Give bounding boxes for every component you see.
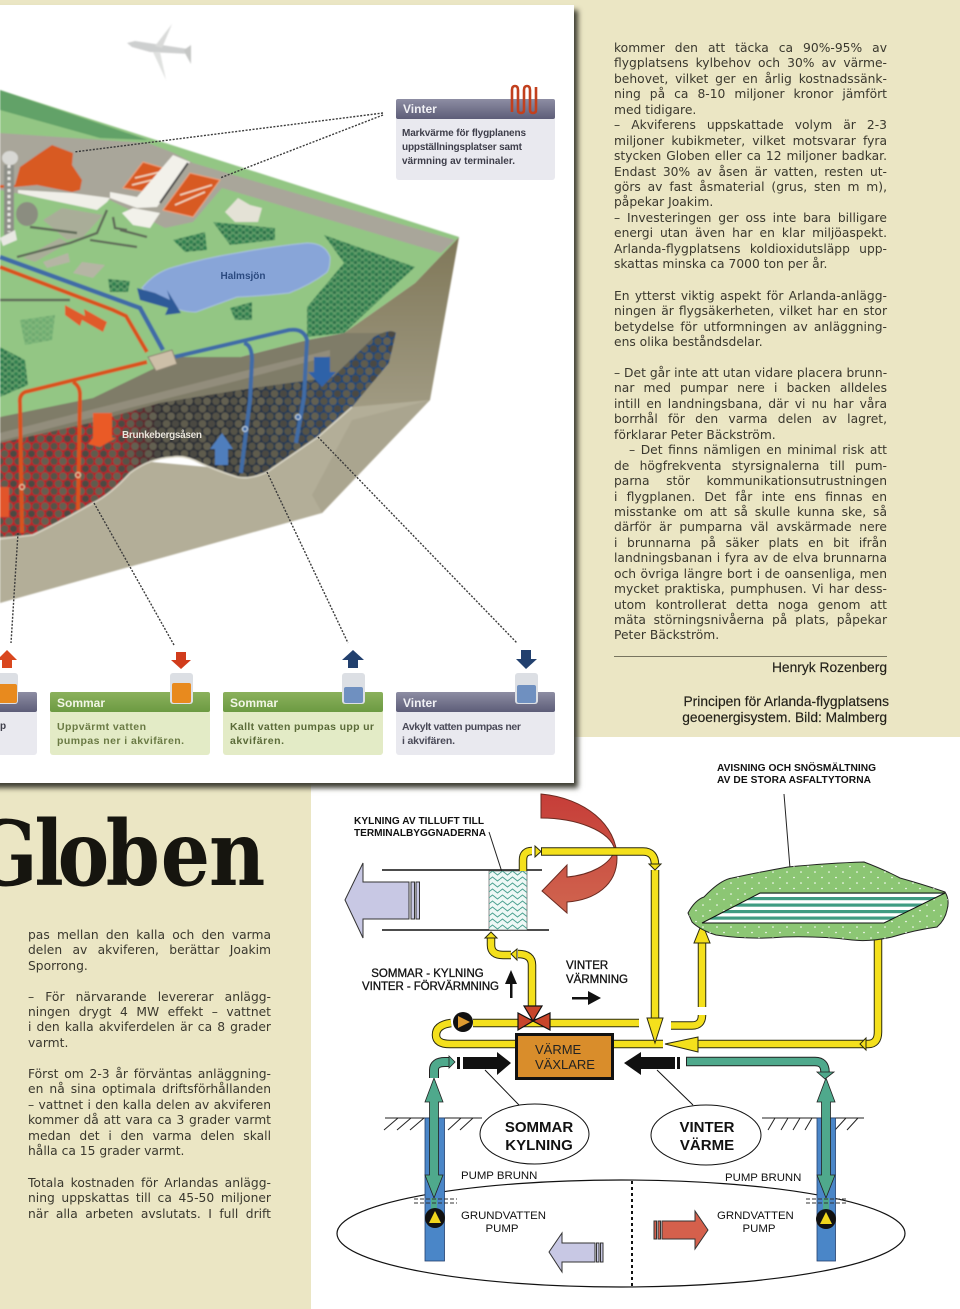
callout: winter ground heat: Markvärme för flygplanens — [402, 128, 526, 139]
label: right pump well: PUMP BRUNN — [725, 1172, 801, 1184]
text block: left column paragraph 3: hålla ca 15 grader varmt. — [28, 1144, 184, 1158]
upper earth band — [0, 333, 396, 449]
leader lines to ovals — [485, 1070, 693, 1105]
green surface — [0, 90, 459, 417]
label: right groundwater pump: PUMP — [743, 1223, 775, 1235]
label: seasonal modes — [362, 968, 499, 993]
text block: right column paragraph 3 — [614, 366, 888, 642]
text block: right column paragraph 2 — [614, 289, 888, 349]
text block: left column paragraph 4: när alla arbeten avslutats. I full drift — [28, 1207, 271, 1221]
text block: right column paragraph 1: stycken Globen eller ca 12 miljoner badkar. — [614, 149, 887, 163]
label: left groundwater pump: GRUNDVATTEN — [461, 1210, 546, 1222]
label: de-icing — [717, 761, 876, 786]
author rule and byline — [614, 656, 887, 675]
text block: left column paragraph 2: ningen drygt 4 MW effekt – vattnet — [28, 1005, 271, 1019]
text block: left column paragraph 3: Först om 2-3 år förväntas anläggning- — [28, 1067, 271, 1081]
lake — [142, 243, 330, 312]
text block: right column paragraph 1: – Akviferens uppskattade volym är 2-3 — [614, 118, 887, 132]
aquifer — [0, 331, 396, 537]
pump house — [148, 350, 177, 371]
callout: summer warm water: pumpas ner i akvifären. — [57, 735, 184, 747]
callout: winter ground heat: värmning av terminaler. — [402, 156, 515, 167]
oval: winter heat — [651, 1105, 761, 1165]
text block: right column paragraph 1: – Investeringen ger oss inte bara billigare — [614, 211, 887, 225]
text block: right column paragraph 1: med tidigare. — [614, 103, 696, 117]
text block: right column paragraph 3: parna stör kommunikationsutrustningen — [614, 474, 887, 488]
text block: left column paragraph 3: kommer då att vara ca 3 grader varmt — [28, 1113, 271, 1127]
text block: left column paragraph 4 — [28, 1176, 271, 1221]
callout: winter cooled water: i akvifären. — [402, 735, 455, 747]
divider — [631, 1181, 633, 1287]
label: cooling: KYLNING AV TILLUFT TILL — [354, 816, 484, 827]
callout: winter ground heat — [396, 86, 555, 180]
text block: left column paragraph 1: pas mellan den kalla och den varma — [28, 928, 271, 942]
text block: right column paragraph 3: Peter Bäckström. — [614, 628, 719, 642]
callout: summer cold water: Kallt vatten pumpas upp ur — [230, 721, 374, 733]
callout: winter ground heat: Vinter — [403, 102, 437, 116]
text block: left column paragraph 2: i den kalla akviferdelen är ca 8 grader — [28, 1020, 271, 1034]
green pipes — [434, 1062, 825, 1078]
label: left groundwater pump — [461, 1210, 546, 1235]
heat exchanger — [516, 1034, 612, 1078]
text block: right column paragraph 3: nar med pumpar nere i backen alldeles — [614, 381, 887, 395]
yellow arrowheads — [485, 846, 866, 1052]
callout: summer cold water: Sommar — [230, 696, 278, 710]
text block: left column paragraph 3: medan det i den varma delen skall — [28, 1129, 271, 1143]
label: right groundwater pump — [717, 1210, 794, 1235]
callout: winter ground heat: uppställningsplatser samt — [402, 142, 523, 153]
text block: right column paragraph 1: behovet, vilket ger en årlig kostnadssänk- — [614, 72, 887, 86]
text block: right column paragraph 3: och övriga längre bort i de oansenliga, men — [614, 567, 887, 581]
label: right groundwater pump: GRNDVATTEN — [717, 1210, 794, 1222]
aquifer label: Brunkebergsåsen — [122, 429, 202, 441]
callout: winter cooled water — [396, 650, 555, 755]
panel: airport illustration — [0, 5, 574, 783]
text block: right column paragraph 3: utom kontrollerat detta noga genom att — [614, 598, 887, 612]
pale lower earth — [0, 400, 430, 603]
text block: right column paragraph 1: energi utan även har en klar miljöaspekt. — [614, 226, 887, 240]
dotted callout lines — [11, 113, 517, 645]
lake label: Halmsjön — [220, 271, 266, 282]
text block: right column paragraph 3: intill en landningsbana, där vi nu har våra — [614, 397, 887, 411]
text block: right column paragraph 3: mäta störningsnivåerna på plats, påpekar — [614, 613, 887, 627]
label: left pump well: PUMP BRUNN — [461, 1170, 537, 1182]
terrain block — [0, 90, 459, 603]
icon: three-way valve — [518, 1006, 550, 1030]
image caption: geoenergisystem. Bild: Malmberg — [682, 710, 887, 724]
earth side face — [344, 237, 459, 407]
terminal — [0, 145, 82, 192]
text block: left column paragraph 1: Sporrong. — [28, 959, 88, 973]
oval: summer cooling: SOMMAR — [505, 1119, 573, 1136]
callout: partial left box: p — [0, 721, 6, 732]
pipes — [0, 267, 147, 352]
text block: right column paragraph 3: i brunnarna på säker plats en bit ifrån — [614, 536, 887, 550]
well: right — [806, 1078, 848, 1261]
illustration: airport aquifer cross-section — [0, 26, 555, 755]
callout: winter cooled water: Avkylt vatten pumpas ner — [402, 721, 521, 733]
text block: right column paragraph 1: skattas minska ca 7000 ton per år. — [614, 257, 827, 271]
green arrowheads — [449, 1056, 834, 1079]
arrow: warm flow right — [654, 1211, 708, 1249]
oval: summer cooling: KYLNING — [505, 1137, 573, 1154]
callout: summer warm water: Sommar — [57, 696, 105, 710]
arrow: supply air left — [345, 863, 420, 938]
parking areas — [43, 208, 103, 240]
text block: right column paragraph 3: därför är pumparna väl avskärmade nere — [614, 520, 887, 534]
text block: right column paragraph 1 — [614, 41, 887, 271]
callout: summer warm water — [50, 652, 210, 755]
label: winter heating — [566, 960, 628, 986]
runway and apron — [0, 133, 455, 253]
text block: right column paragraph 3: mycket praktiska, pumphusen. Vi har dess- — [614, 582, 887, 596]
forests — [307, 235, 415, 337]
label: seasonal modes: VINTER - FÖRVÄRMNING — [362, 981, 499, 993]
text block: right column paragraph 1: miljoner kubikmeter, vilket motsvarar fyra — [614, 134, 887, 148]
oval: winter heat: VÄRME — [680, 1137, 734, 1154]
text block: right column paragraph 1: Arlanda-flygplatsens koldioxidutsläpp upp- — [614, 242, 887, 256]
white background behind diagram — [311, 737, 960, 1309]
text block: left column paragraph 1 — [28, 928, 271, 973]
arrow: up — [505, 970, 517, 998]
text block: left column paragraph 2: – För närvarande levererar anlägg- — [28, 990, 271, 1004]
heat exchanger: VÄRME — [535, 1042, 582, 1057]
arrow: black winter — [624, 1052, 680, 1075]
text block: left column paragraph 2: varmt. — [28, 1036, 68, 1050]
text block: right column paragraph 3: i flygplanen. Det får inte ens finnas en — [614, 490, 887, 504]
text block: left column paragraph 3 — [28, 1066, 271, 1158]
text block: right column paragraph 1: ning på ca 8-10 miljoner kronor jämfört — [614, 87, 887, 101]
text block: right column paragraph 1: påpekar Joakim. — [614, 195, 713, 209]
text block: left column paragraph 2 — [28, 990, 271, 1050]
callout: partial left box — [0, 650, 37, 755]
author rule and byline: Henryk Rozenberg — [772, 660, 887, 675]
text block: left column paragraph 4: ning uppskattas till ca 45-50 miljoner — [28, 1191, 271, 1205]
leader lines — [489, 794, 792, 900]
label: cooling: TERMINALBYGGNADERNA — [354, 828, 487, 839]
text block: right column paragraph 2: ens olika beståndsdelar. — [614, 335, 763, 349]
icon: circulation pump — [453, 1012, 473, 1032]
oval: winter heat: VINTER — [679, 1119, 735, 1136]
callout: summer cold water — [223, 650, 383, 755]
control tower — [4, 165, 14, 235]
text block: right column paragraph 1: kommer den att täcka ca 90%-95% av — [614, 41, 887, 55]
text block: left column paragraph 3: – vattnet i den kalla delen av akviferen — [28, 1098, 271, 1112]
text block: right column paragraph 1: görs av fast åsmaterial (grus, sten m m), — [614, 180, 887, 194]
label: seasonal modes: SOMMAR - KYLNING — [371, 968, 484, 980]
arrow: red curved heat — [541, 794, 617, 913]
text block: right column paragraph 3: misstanke om att så skulle kunna ske, så — [614, 505, 887, 519]
arrow: cold flow left — [549, 1233, 603, 1272]
coil — [489, 871, 527, 930]
ground surface lines — [384, 1118, 864, 1130]
arrow: right — [572, 991, 601, 1005]
text block: right column paragraph 3: landningsbanan i fyra av de elva brunnarna — [614, 551, 887, 565]
text block: right column paragraph 3: – Det finns nämligen en minimal risk att — [629, 443, 887, 457]
image caption: Principen för Arlanda-flygplatsens — [683, 694, 889, 709]
text block: left column paragraph 1: delen av akviferen, berättar Joakim — [28, 943, 271, 957]
text block: right column paragraph 3: – Det går inte att utan vidare placera brunn- — [614, 366, 887, 380]
label: winter heating: VÄRMNING — [566, 974, 628, 986]
label: winter heating: VINTER — [566, 960, 608, 972]
label: de-icing: AV DE STORA ASFALTYTORNA — [717, 775, 872, 786]
text block: right column paragraph 3: de högfrekventa styrsignalerna till pum- — [614, 459, 887, 473]
callout: winter cooled water: Vinter — [403, 696, 437, 710]
heat exchanger: VÄXLARE — [535, 1057, 595, 1072]
arrow: black summer — [457, 1052, 511, 1075]
label: cooling — [354, 816, 487, 839]
text block: right column paragraph 2: ningen är flygsäkerheten, vilket har en stor — [614, 304, 887, 318]
callout: summer warm water: Uppvärmt vatten — [57, 721, 146, 733]
text block: right column paragraph 3: borrhål för den varma delen av lagret, — [614, 412, 887, 426]
de-icing area — [688, 862, 948, 941]
label: de-icing: AVISNING OCH SNÖSMÄLTNING — [717, 761, 876, 774]
airplane — [127, 24, 191, 80]
text block: right column paragraph 1: flygplatsens kylbehov och 30% av värme- — [614, 56, 887, 70]
aquifer ellipse — [337, 1180, 905, 1287]
label: left groundwater pump: PUMP — [486, 1223, 518, 1235]
roads — [0, 210, 147, 300]
oval: summer cooling — [480, 1104, 589, 1164]
image caption — [682, 694, 889, 726]
well: left — [414, 1078, 457, 1261]
icon: ventilation duct lines — [382, 870, 549, 930]
text block: left column paragraph 4: Totala kostnaden för Arlandas anlägg- — [28, 1176, 271, 1190]
yellow pipes — [436, 851, 878, 1044]
callout: summer cold water: akvifären. — [230, 735, 284, 747]
text block: right column paragraph 2: betydelse för utformningen av anläggning- — [614, 320, 887, 334]
diagram: geoenergy system schematic — [336, 761, 949, 1288]
text block: right column paragraph 3: förklarar Peter Bäckström. — [614, 428, 776, 442]
text block: right column paragraph 1: Endast 30% av åsen är vatten, resten ut- — [614, 164, 887, 178]
text block: right column paragraph 2: En ytterst viktig aspekt för Arlanda-anlägg- — [614, 289, 887, 303]
arrows — [137, 288, 181, 315]
text block: left column paragraph 3: en nå sina optimala driftsförhållanden — [28, 1082, 271, 1096]
